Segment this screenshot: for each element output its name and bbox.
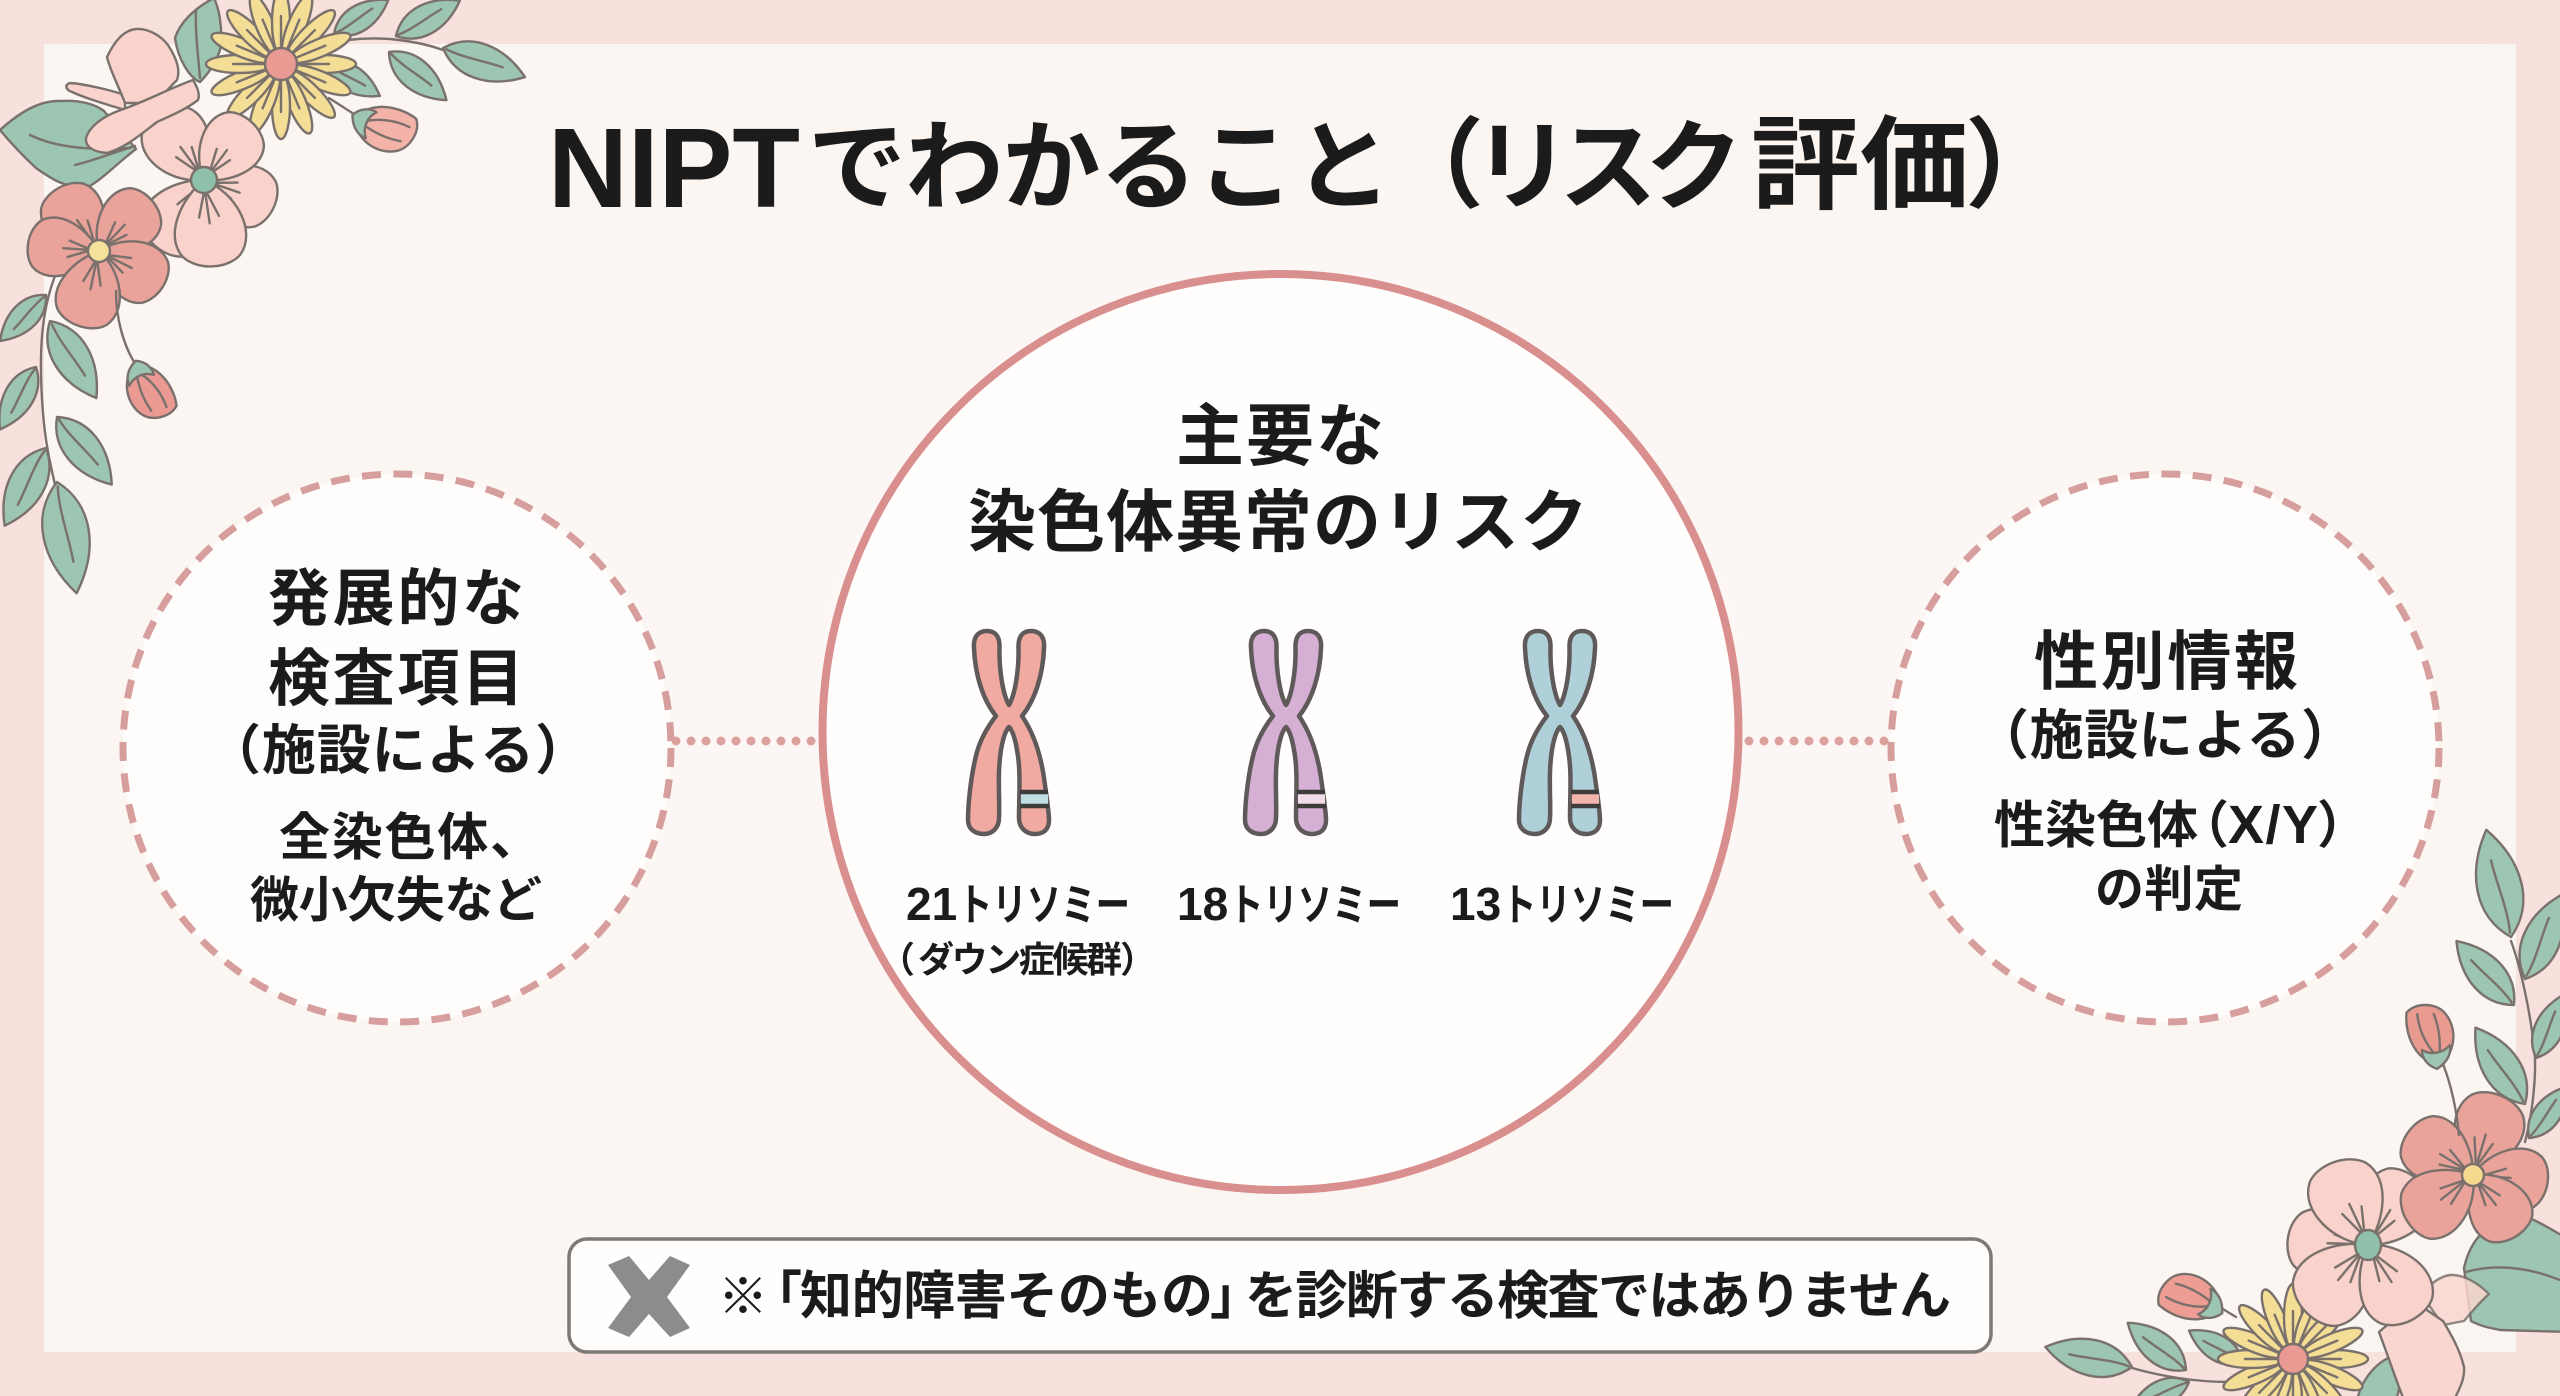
detail line 1: （ [2178,797,2229,854]
label: Down syndrome note: （ [879,939,915,980]
floral decoration: bottom right corner [2041,825,2560,1396]
title: でわかること [808,112,1392,222]
detail line 1 [1994,795,2368,855]
chromosome: 18 trisomy [1245,631,1326,834]
detail line 2: の判定 [2095,863,2243,917]
coral flower [27,171,177,333]
label: 13 trisomy: トリソミー [1502,881,1674,930]
label: Down syndrome note: ） [1120,939,1156,980]
pale pink back flower [66,29,178,110]
pink flower [131,94,284,272]
title: 評価 [1751,109,1969,223]
label: 13 trisomy: 13 [1450,878,1501,930]
title [548,105,2063,231]
disclaimer text: 「 [750,1268,802,1326]
yellow daisy [206,0,356,139]
bottom sprig leaves [2041,1311,2250,1396]
chromosome: 21 trisomy [968,631,1049,834]
bud: upper [2402,999,2461,1135]
connector: right [1749,736,1888,746]
disclaimer text [718,1268,1951,1326]
floral decoration: top left corner [0,0,531,597]
connector: left [676,736,815,746]
bud: lower [2154,1266,2236,1331]
title: ） [1965,110,2063,220]
callout: disclaimer box [569,1239,1991,1352]
disclaimer text: ※ [718,1269,768,1325]
large green leaf [2357,1216,2560,1396]
label: Down syndrome note: ダウン症候群 [918,939,1122,980]
pale pink front petal [86,80,199,153]
panel: right circle, sex information [1891,474,2439,1022]
panel: left circle, developmental test items [123,474,671,1022]
disclaimer text: を診断する検査ではありません [1245,1268,1951,1326]
label: 18 trisomy: 18 [1177,878,1228,930]
pink flower [2279,1147,2445,1339]
heading line 1: 主要な [1176,399,1384,475]
icon: cross mark [608,1256,690,1337]
bud: upper [329,97,421,159]
detail line 1: ） [2317,797,2368,854]
facility note: （施設による） [207,721,589,781]
large green leaves [0,0,221,188]
facility note: （施設による） [1975,706,2355,766]
chromosome: 13 trisomy [1519,631,1600,834]
detail line 1: X/Y [2228,795,2318,855]
yellow daisy [2218,1284,2368,1396]
pale pink back flower [2379,1275,2489,1396]
label: 18 trisomy [1177,878,1401,930]
detail line 1: 性染色体 [1994,797,2198,854]
bud: lower [115,291,181,427]
label: 18 trisomy: トリソミー [1229,881,1401,930]
heading: 性別情報 [2034,626,2298,698]
heading line 2: 検査項目 [268,645,524,714]
left branch with leaves [0,276,125,597]
title: （ [1386,110,1484,220]
detail line 1: 全染色体、 [279,809,541,866]
coral flower [2388,1085,2549,1254]
top sprig leaves [318,0,531,112]
right branch with leaves [2444,825,2560,1146]
label: 13 trisomy [1450,878,1674,930]
label: 21 trisomy: トリソミー [958,881,1130,930]
heading line 2: 染色体異常のリスク [968,485,1588,561]
detail line 2: 微小欠失など [250,874,542,928]
label: 21 trisomy [906,878,1130,930]
heading: 発展的な [268,565,524,634]
disclaimer text: 知的障害そのもの [800,1268,1213,1326]
title: NIPT [548,105,800,231]
disclaimer text: 」 [1210,1268,1262,1326]
title: リスク [1473,112,1743,222]
label: 21 trisomy: 21 [906,878,957,930]
panel: main circle, major chromosomal abnormality risk [822,274,1738,1190]
